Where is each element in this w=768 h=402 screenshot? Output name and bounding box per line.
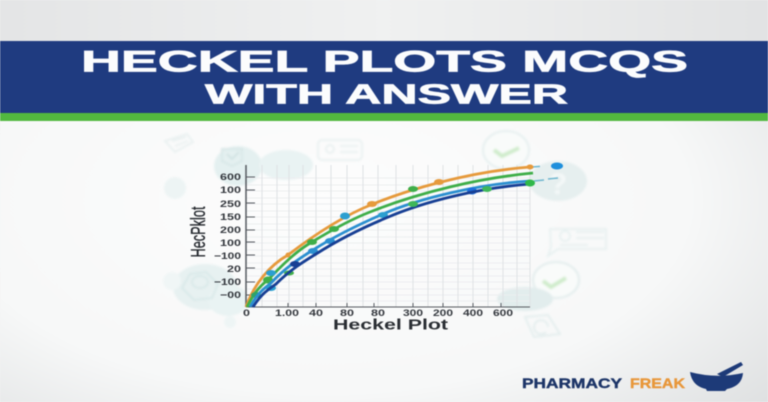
- x-axis tick labels: 400: [463, 308, 483, 319]
- logo: FREAK: [630, 375, 685, 391]
- y-axis tick labels: [214, 172, 241, 301]
- curve: navy: [253, 180, 535, 307]
- curve: green: [247, 173, 533, 307]
- x-axis tick labels: 40: [309, 308, 323, 319]
- logo: [522, 362, 743, 391]
- y-axis tick labels: 250: [220, 199, 241, 210]
- x-axis tick labels: 600: [493, 308, 513, 319]
- small dot: [164, 177, 186, 199]
- y-axis tick labels: 200: [220, 225, 241, 236]
- title: [81, 46, 688, 110]
- y-axis tick labels: −100: [214, 251, 241, 262]
- x-axis tick labels: 300: [403, 308, 423, 319]
- icon: text bubble top: [318, 140, 362, 160]
- icon: at-sign bubble: [525, 315, 560, 337]
- curve: blue: [250, 162, 563, 307]
- icon: text bubble right: [548, 229, 606, 256]
- y-axis tick labels: 20: [227, 264, 241, 275]
- y-axis tick labels: 100: [220, 238, 241, 249]
- title: WITH ANSWER: [205, 78, 568, 110]
- y-axis tick labels: −00: [220, 290, 241, 301]
- y-axis tick labels: −100: [214, 277, 241, 288]
- green stripe: [0, 113, 768, 121]
- title banner: [0, 41, 768, 121]
- x-axis tick labels: 1.00: [275, 308, 299, 319]
- faint background icons: [163, 131, 606, 337]
- x-axis tick labels: 80: [340, 308, 354, 319]
- x-axis tick labels: [243, 308, 513, 319]
- icon: question blob: [529, 161, 587, 201]
- axes: [246, 165, 530, 307]
- y-axis title: HecPklot: [188, 206, 210, 258]
- x-axis tick labels: 80: [371, 308, 385, 319]
- title: HECKEL PLOTS MCQS: [81, 46, 688, 78]
- logo text: PHARMACY: [522, 375, 623, 391]
- icon: check bubble bottom right: [497, 262, 579, 311]
- x-axis tick labels: 0: [243, 308, 250, 319]
- icon: mortar and pestle: [690, 362, 743, 391]
- icon: gear blob left: [163, 264, 248, 328]
- chart: [188, 162, 563, 334]
- icon: question blob: ?: [549, 168, 567, 201]
- icon: note top left: [165, 134, 193, 152]
- x-axis title: Heckel Plot: [333, 318, 448, 334]
- y-axis tick labels: 100: [220, 185, 241, 196]
- icon: check bubble top right: [483, 131, 529, 169]
- icon: checkbox blob: [214, 146, 313, 186]
- x-axis tick labels: 200: [433, 308, 453, 319]
- grid: [246, 165, 530, 307]
- curve: orange: [246, 164, 544, 307]
- y-axis tick labels: 600: [220, 172, 241, 183]
- y-axis tick labels: 150: [220, 212, 241, 223]
